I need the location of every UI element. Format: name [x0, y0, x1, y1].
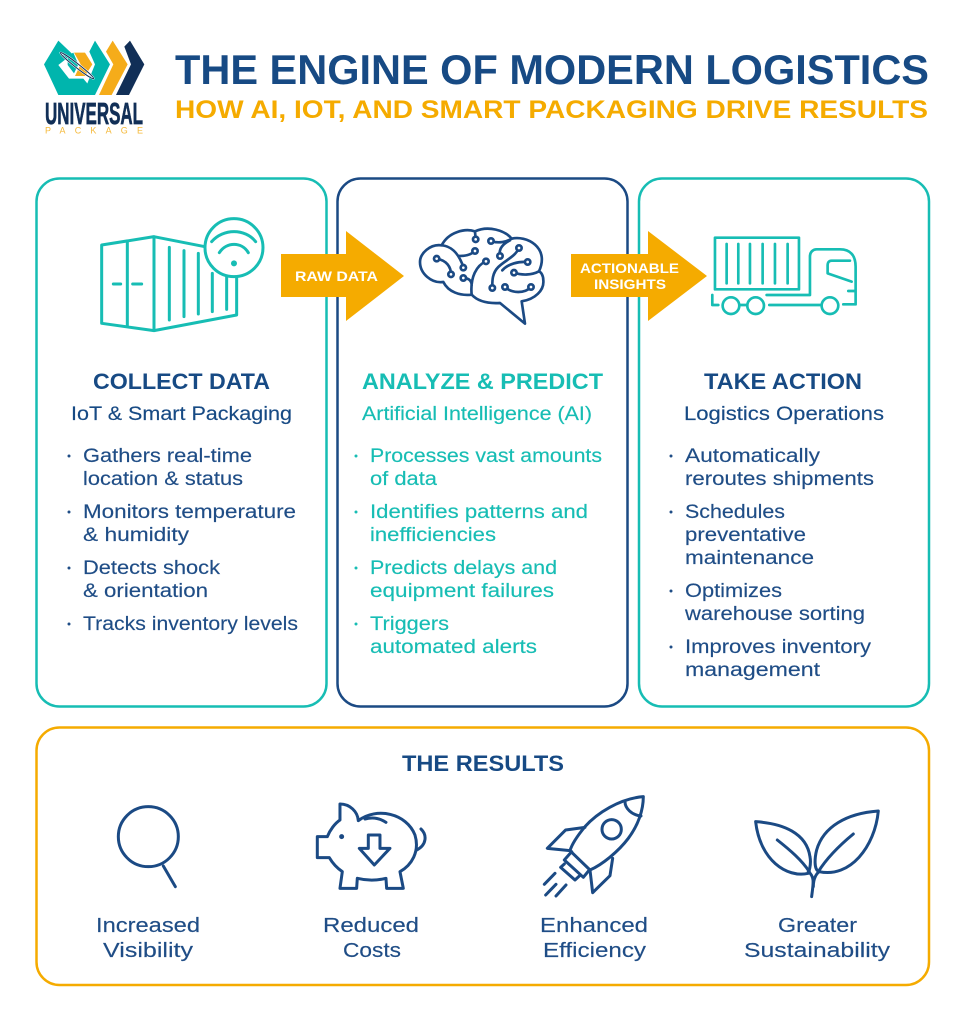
result: reduced costs: Reduced	[323, 914, 419, 937]
panel: analyze and predict	[338, 178, 628, 706]
result: enhanced efficiency: Enhanced	[540, 914, 648, 937]
arrow: raw data	[281, 231, 404, 321]
bullet list: analyze and predict: Identifies patterns and	[370, 502, 588, 523]
arrow: actionable insights: INSIGHTS	[594, 277, 666, 292]
result: reduced costs	[317, 804, 425, 962]
bullet list: analyze and predict: Processes vast amounts	[370, 446, 602, 467]
result: enhanced efficiency: Efficiency	[543, 939, 647, 962]
bullet list: analyze and predict: of data	[370, 469, 437, 490]
icon: container truck	[712, 238, 856, 314]
bullet list: analyze and predict	[354, 446, 602, 658]
bullet list: take action	[670, 446, 874, 681]
bullet list: collect data: Gathers real-time	[83, 446, 252, 467]
bullet list: take action: Optimizes	[685, 581, 782, 602]
bullet list: analyze and predict: Triggers	[370, 614, 449, 635]
bullet list: take action: management	[685, 660, 821, 681]
subheading: artificial intelligence: Artificial Intelligence (AI)	[362, 404, 592, 425]
result: increased visibility	[96, 807, 200, 962]
result: greater sustainability: Sustainability	[744, 939, 891, 962]
logo: Universal Package: PACKAGE	[45, 126, 143, 136]
bullet list: collect data: Monitors temperature	[83, 502, 296, 523]
arrow: raw data: RAW DATA	[295, 269, 378, 284]
bullet list: take action: Improves inventory	[685, 637, 872, 658]
bullet list: analyze and predict: equipment failures	[370, 581, 554, 602]
logo: Universal Package	[44, 41, 144, 135]
arrow: actionable insights: ACTIONABLE	[580, 261, 679, 276]
bullet list: take action: preventative	[685, 525, 806, 546]
result: greater sustainability: Greater	[778, 914, 857, 937]
icon: circuit brain	[420, 229, 543, 324]
result: enhanced efficiency	[540, 797, 648, 962]
bullet list: collect data: Tracks inventory levels	[83, 614, 298, 635]
bullet list: take action: reroutes shipments	[685, 469, 874, 490]
result: greater sustainability	[744, 811, 891, 962]
bullet list: take action: warehouse sorting	[684, 604, 865, 625]
icon: shipping container with wifi	[102, 219, 263, 331]
bullet list: take action: Automatically	[685, 446, 821, 467]
subheading: logistics operations: Logistics Operations	[684, 404, 884, 425]
bullet list: analyze and predict: inefficiencies	[370, 525, 496, 546]
bullet list: analyze and predict: Predicts delays and	[370, 558, 557, 579]
result: increased visibility: Increased	[96, 914, 200, 937]
bullet list: analyze and predict: automated alerts	[370, 637, 537, 658]
panel: the results	[36, 728, 929, 985]
bullet list: collect data: & humidity	[83, 525, 190, 546]
subheading: IoT and smart packaging: IoT & Smart Packaging	[71, 404, 292, 425]
bullet list: collect data	[68, 446, 298, 635]
panel: take action	[639, 178, 929, 706]
logo: Universal Package: UNIVERSAL	[45, 96, 143, 131]
result: reduced costs: Costs	[343, 939, 401, 962]
bullet list: collect data: & orientation	[83, 581, 208, 602]
bullet list: collect data: Detects shock	[83, 558, 221, 579]
bullet list: take action: maintenance	[685, 548, 814, 569]
heading: analyze and predict: ANALYZE & PREDICT	[362, 369, 604, 394]
heading: the results: THE RESULTS	[402, 751, 564, 776]
subtitle: HOW AI, IOT, AND SMART PACKAGING DRIVE RESULTS	[175, 96, 928, 124]
bullet list: collect data: location & status	[83, 469, 243, 490]
arrow: actionable insights	[571, 231, 707, 321]
panel: collect data	[36, 178, 326, 706]
heading: take action: TAKE ACTION	[704, 369, 862, 394]
title: THE ENGINE OF MODERN LOGISTICS	[175, 46, 929, 93]
bullet list: take action: Schedules	[685, 502, 785, 523]
result: increased visibility: Visibility	[103, 939, 194, 962]
heading: collect data: COLLECT DATA	[93, 369, 270, 394]
